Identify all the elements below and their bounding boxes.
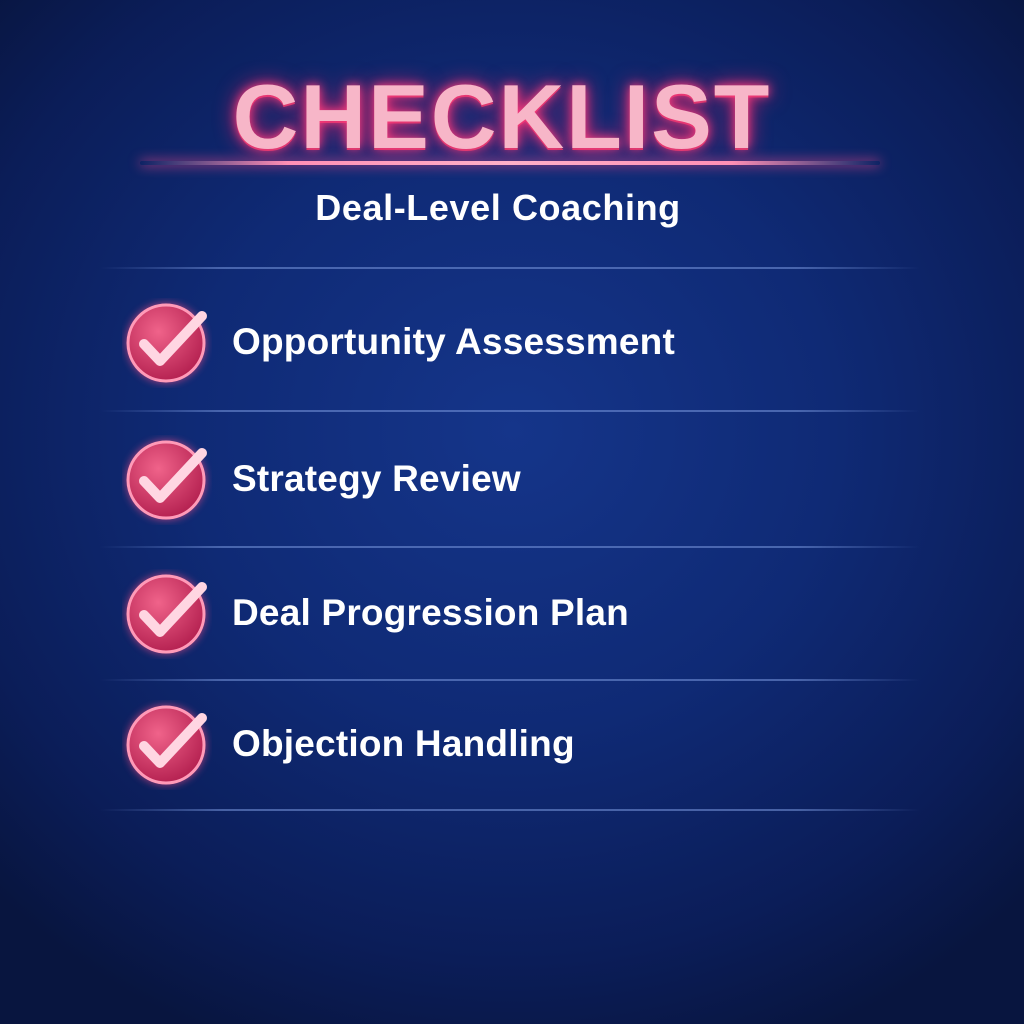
item: Strategy Review: Strategy Review — [232, 458, 521, 499]
item: Objection Handling: Objection Handling — [232, 723, 575, 764]
item: Opportunity Assessment — [122, 298, 675, 388]
title underline glow — [140, 161, 880, 165]
item: Deal Progression Plan — [122, 569, 629, 659]
item: Deal Progression Plan: Deal Progression Plan — [232, 592, 629, 633]
item: Opportunity Assessment: Opportunity Assessment — [232, 321, 675, 362]
subtitle: Deal-Level Coaching — [315, 187, 681, 228]
item: Objection Handling — [122, 700, 575, 790]
icon: check — [122, 298, 212, 388]
icon: check — [122, 700, 212, 790]
icon: check — [122, 569, 212, 659]
icon: check — [122, 435, 212, 525]
item: Strategy Review — [122, 435, 521, 525]
title: CHECKLIST — [233, 67, 771, 168]
